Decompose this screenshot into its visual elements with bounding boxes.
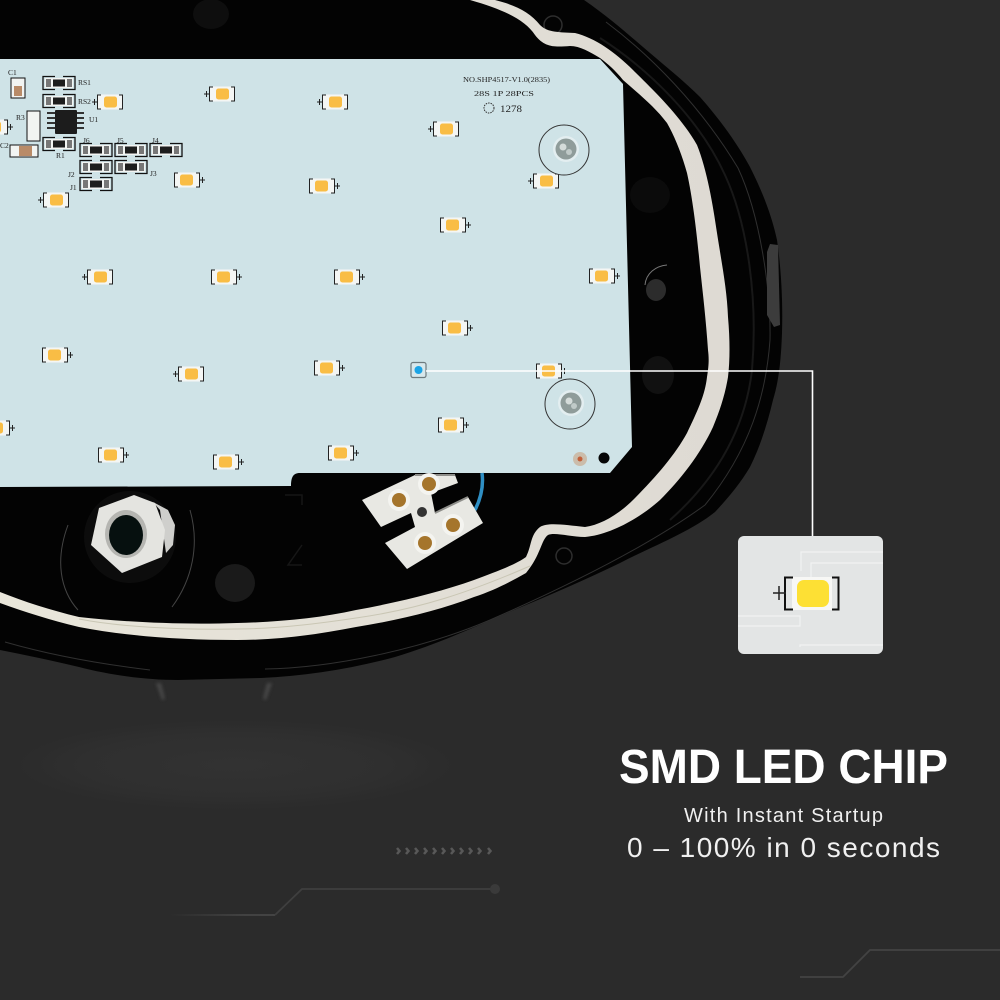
board marking text: RS1 (78, 78, 91, 87)
board marking text: NO.SHP4517-V1.0(2835) (463, 75, 551, 84)
gasket seal (0, 0, 730, 640)
cable gland nut (91, 495, 175, 573)
title: SMD LED CHIP (619, 741, 948, 794)
board marking text: J1 (70, 183, 77, 192)
black lamp housing (0, 0, 782, 680)
chevron row decoration (397, 848, 490, 854)
board marking text: C1 (8, 68, 17, 77)
board marking text: J2 (68, 170, 75, 179)
wire terminal block (362, 473, 483, 569)
board marking text: J4 (152, 136, 159, 145)
circuit trace left (170, 884, 500, 915)
led chips on board (0, 86, 620, 470)
callout card: led chip close-up (738, 536, 883, 654)
board marking text: 28S 1P 28PCS (474, 89, 534, 98)
contact pad and hole (573, 452, 610, 466)
callout marker (411, 362, 426, 378)
board marking text: J6 (83, 136, 90, 145)
mounting screw bottom (545, 379, 595, 429)
circuit trace right (800, 950, 1000, 977)
board marking text (0, 68, 551, 192)
board marking text: J5 (117, 136, 124, 145)
board marking text: R1 (56, 151, 65, 160)
callout leader line (426, 371, 812, 537)
board marking text: R3 (16, 113, 25, 122)
subtitle: With Instant Startup (684, 805, 883, 827)
housing reflection (15, 683, 455, 810)
certification mark (484, 103, 494, 113)
board marking text: C2 (0, 141, 9, 150)
startup statement: 0 – 100% in 0 seconds (627, 832, 940, 863)
mounting screw top (539, 125, 589, 175)
board marking text: 1278 (500, 104, 523, 114)
board marking text: J3 (150, 169, 157, 178)
board marking text: U1 (89, 115, 98, 124)
LED circuit board (0, 59, 632, 487)
smd components (10, 76, 182, 190)
board marking text: RS2 (78, 97, 91, 106)
